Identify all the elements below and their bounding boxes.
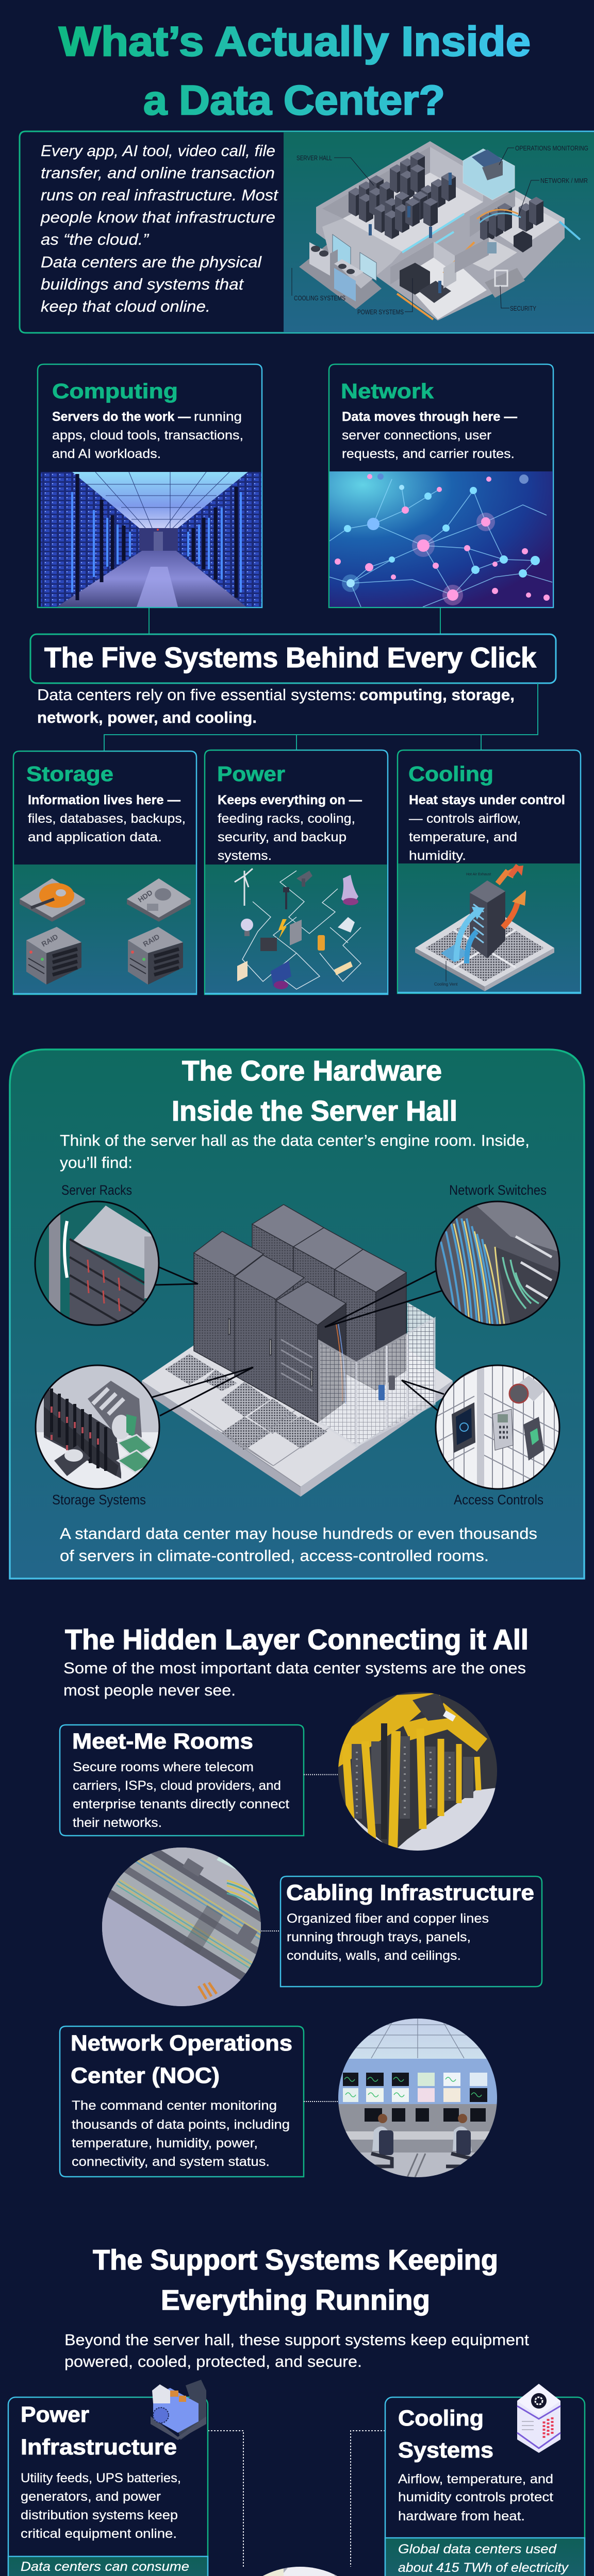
panel: network operations center: connectivity, and system status. xyxy=(72,2155,270,2169)
illustration: rack cooling airflow: Cooling Vent xyxy=(434,982,458,987)
circle: storage systems xyxy=(36,1365,159,1494)
circle: central support systems illustration xyxy=(263,2567,337,2576)
intro text: people know that infrastructure xyxy=(40,208,275,226)
panel: cooling systems xyxy=(385,2384,585,2576)
computing text: apps, cloud tools, transactions, xyxy=(52,428,243,443)
storage text: files, databases, backups, xyxy=(28,811,186,826)
panel: meet-me rooms: their networks. xyxy=(73,1816,162,1830)
network text: Data moves through here — xyxy=(342,410,517,424)
stat callout: energy xyxy=(8,2556,208,2576)
power text: systems. xyxy=(218,849,272,863)
heading: core hardware xyxy=(172,1055,457,1127)
intro text: buildings and systems that xyxy=(41,275,244,293)
circle: meet-me room photo xyxy=(338,1692,497,1851)
stat callout: electricity xyxy=(385,2538,585,2576)
connector: meet-me xyxy=(304,1774,338,1775)
panel: cabling infrastructure xyxy=(280,1876,542,1987)
core hardware intro text xyxy=(60,1131,530,1172)
back row of racks xyxy=(252,1205,406,1390)
icon: RAID server right: RAID xyxy=(141,933,161,948)
panel: network operations center: temperature, humidity, power, xyxy=(72,2136,258,2150)
cooling text: Heat stays under control xyxy=(409,793,565,807)
circle: access controls xyxy=(436,1365,559,1494)
intro text: Data centers are the physical xyxy=(41,253,262,271)
storage text xyxy=(28,793,186,844)
circle: network switches xyxy=(436,1201,559,1325)
icon: RAID server right xyxy=(128,927,183,985)
heading: power: Power xyxy=(217,762,285,786)
intro text: runs on real infrastructure. Most xyxy=(41,186,278,204)
cooling text: — controls airflow, xyxy=(409,811,521,826)
panel: computing xyxy=(38,364,262,607)
circle: server racks xyxy=(35,1201,159,1337)
hidden layer intro text: most people never see. xyxy=(63,1681,236,1699)
connector: NOC xyxy=(304,2101,338,2102)
panel: power infrastructure: distribution systems keep xyxy=(21,2508,178,2522)
callout wedges xyxy=(152,1267,444,1416)
illustration: server racks on raised floor xyxy=(142,1205,453,1497)
panel: cooling xyxy=(398,750,581,993)
circle: NOC photo xyxy=(338,2018,497,2178)
connector: computing to five systems xyxy=(149,607,440,635)
panel: cooling systems: humidity controls protect xyxy=(398,2490,553,2504)
intro text: transfer, and online transaction xyxy=(41,164,275,182)
image: network graph xyxy=(329,471,553,607)
illustration: power network xyxy=(235,869,361,989)
security cage xyxy=(319,1302,435,1446)
circle: cabling photo xyxy=(102,1848,261,2006)
label: server racks: Server Racks xyxy=(61,1182,132,1198)
power text: feeding racks, cooling, xyxy=(218,811,355,826)
panel: storage xyxy=(13,751,196,994)
power text xyxy=(218,793,362,863)
panel: meet-me rooms xyxy=(60,1725,304,1836)
panel: cooling systems: Airflow, temperature, and xyxy=(398,2472,553,2486)
panel: cabling infrastructure: Cabling Infrastructure xyxy=(286,1880,534,1905)
core hardware closing text xyxy=(60,1524,537,1565)
intro text: as “the cloud.” xyxy=(41,230,150,248)
panel: cooling systems: hardware from heat. xyxy=(398,2509,525,2523)
support systems intro text: powered, cooled, protected, and secure. xyxy=(64,2352,362,2370)
panel: meet-me rooms: carriers, ISPs, cloud providers, and xyxy=(73,1778,281,1793)
support systems intro text xyxy=(64,2331,529,2370)
stat callout: electricity: about 415 TWh of electricity xyxy=(398,2561,569,2575)
title: a Data Center? xyxy=(143,77,445,124)
hidden layer intro text: Some of the most important data center systems are the ones xyxy=(63,1659,526,1677)
computing text: and AI workloads. xyxy=(52,447,161,461)
intro text xyxy=(40,142,278,315)
five systems text: computing, storage, xyxy=(359,686,515,704)
panel: network operations center xyxy=(60,2026,304,2177)
illustration labels: SECURITY xyxy=(510,304,536,312)
storage text: Information lives here — xyxy=(28,793,180,807)
panel: network operations center: Center (NOC) xyxy=(71,2063,220,2088)
connectors: support systems xyxy=(208,2431,385,2576)
heading: support systems xyxy=(93,2244,498,2316)
heading: support systems: The Support Systems Keeping xyxy=(93,2244,498,2276)
icon: cooling server xyxy=(517,2384,560,2453)
illustration labels: SERVER HALL xyxy=(296,154,332,162)
five systems text: network, power, and cooling. xyxy=(37,708,257,726)
computing text: Servers do the work — xyxy=(52,410,191,424)
label: network switches: Network Switches xyxy=(449,1182,547,1198)
title: What’s Actually Inside xyxy=(59,19,531,65)
title xyxy=(59,19,531,124)
panel: power infrastructure: Power xyxy=(21,2402,89,2427)
panel: network xyxy=(329,364,553,607)
core hardware intro text: you’ll find: xyxy=(60,1154,133,1172)
heading: core hardware: Inside the Server Hall xyxy=(172,1095,457,1127)
heading: computing: Computing xyxy=(52,379,178,403)
panel: cabling infrastructure: conduits, walls, and ceilings. xyxy=(287,1948,461,1963)
panel: network operations center: The command center monitoring xyxy=(72,2098,277,2113)
heading: network: Network xyxy=(341,379,434,403)
panel: power infrastructure: Utility feeds, UPS batteries, xyxy=(21,2471,181,2485)
network text xyxy=(342,410,517,461)
intro text: Every app, AI tool, video call, file xyxy=(41,142,275,160)
five systems text xyxy=(37,686,515,726)
icon: RAID server left: RAID xyxy=(40,933,59,948)
support systems intro text: Beyond the server hall, these support systems keep equipment xyxy=(64,2331,529,2349)
icon: hard drive closed: HDD xyxy=(137,888,154,904)
connector: five systems to cards xyxy=(104,683,538,751)
icon: RAID server left xyxy=(26,927,81,985)
cooling text: humidity. xyxy=(409,849,466,863)
heading: storage: Storage xyxy=(26,762,113,786)
connector: cabling xyxy=(261,1930,280,1931)
cooling text: temperature, and xyxy=(409,830,517,844)
computing text: running xyxy=(194,410,242,424)
panel: meet-me rooms: Meet-Me Rooms xyxy=(72,1729,253,1754)
computing text xyxy=(52,410,243,461)
storage text: and application data. xyxy=(28,830,162,844)
stat callout: electricity: Global data centers used xyxy=(398,2542,557,2556)
network text: requests, and carrier routes. xyxy=(342,447,515,461)
panel: intro xyxy=(20,131,594,333)
heading: hidden layer: The Hidden Layer Connecting it All xyxy=(65,1623,529,1655)
illustration: rack cooling airflow xyxy=(415,866,554,991)
illustration labels xyxy=(294,144,588,316)
network text: server connections, user xyxy=(342,428,491,443)
stat callout: energy: Data centers can consume xyxy=(21,2560,189,2574)
core hardware intro text: Think of the server hall as the data center’s engine room. Inside, xyxy=(60,1131,530,1149)
panel: power infrastructure xyxy=(8,2380,208,2576)
power text: security, and backup xyxy=(218,830,346,844)
heading: support systems: Everything Running xyxy=(161,2284,430,2316)
label: access controls: Access Controls xyxy=(454,1492,543,1507)
panel: meet-me rooms: Secure rooms where telecom xyxy=(73,1760,254,1774)
icon: generator xyxy=(151,2380,206,2440)
cooling text xyxy=(409,793,565,863)
illustration labels: POWER SYSTEMS xyxy=(357,308,404,316)
panel: power xyxy=(205,750,388,994)
panel: cabling infrastructure: running through trays, panels, xyxy=(287,1930,471,1944)
core hardware closing text: A standard data center may house hundreds or even thousands xyxy=(60,1524,537,1543)
icon: hard drive closed xyxy=(127,878,191,922)
panel: cooling systems: Systems xyxy=(398,2438,493,2463)
intro illustration: isometric data center xyxy=(284,132,594,332)
label: storage systems: Storage Systems xyxy=(52,1492,146,1507)
panel: network operations center: thousands of data points, including xyxy=(72,2117,290,2132)
heading box: five systems: The Five Systems Behind Every Click xyxy=(44,641,536,673)
five systems text: Data centers rely on five essential systems: xyxy=(37,686,356,704)
panel: power infrastructure: generators, and power xyxy=(21,2489,161,2504)
hidden layer intro text xyxy=(63,1659,526,1699)
intro text: keep that cloud online. xyxy=(41,297,210,315)
heading: core hardware: The Core Hardware xyxy=(182,1055,442,1087)
illustration labels: COOLING SYSTEMS xyxy=(294,294,345,302)
illustration: rack cooling airflow: Hot Air Exhaust xyxy=(466,873,491,876)
icon: hard drive open xyxy=(20,878,85,922)
front row of racks xyxy=(194,1231,346,1422)
panel: cooling systems: Cooling xyxy=(398,2406,484,2431)
panel: cabling infrastructure: Organized fiber and copper lines xyxy=(287,1911,489,1926)
panel: meet-me rooms: enterprise tenants directly connect xyxy=(73,1797,289,1811)
power text: Keeps everything on — xyxy=(218,793,362,807)
panel: network operations center: Network Operations xyxy=(71,2031,292,2056)
heading: cooling: Cooling xyxy=(408,762,493,786)
panel: power infrastructure: critical equipment online. xyxy=(21,2527,177,2541)
heading box: five systems xyxy=(30,634,556,683)
image: server aisle xyxy=(41,472,261,607)
core hardware closing text: of servers in climate-controlled, access-controlled rooms. xyxy=(60,1547,489,1565)
panel: core hardware xyxy=(10,1049,584,1579)
panel: power infrastructure: Infrastructure xyxy=(21,2435,177,2460)
